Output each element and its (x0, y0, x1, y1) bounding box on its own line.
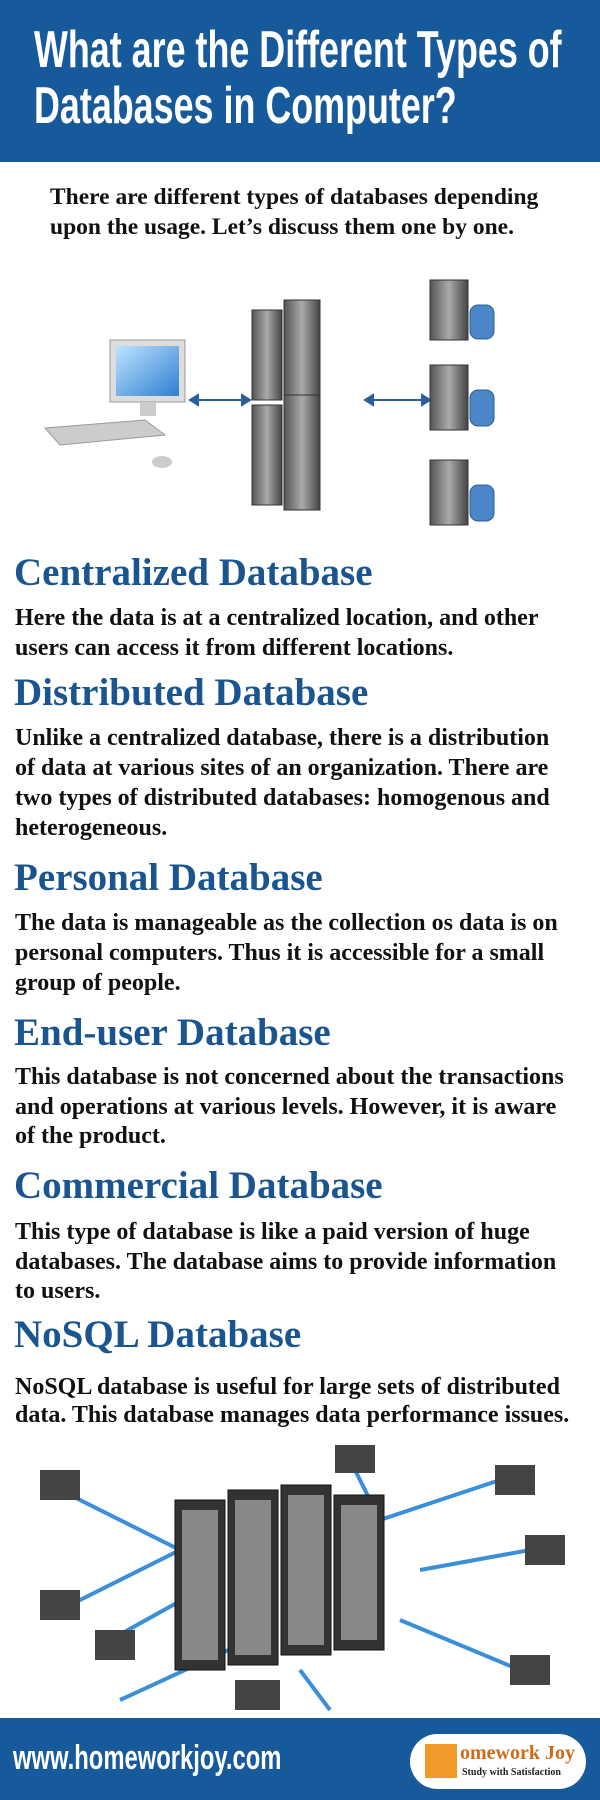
header banner (0, 0, 600, 162)
intro text (50, 184, 538, 240)
db servers (430, 280, 468, 525)
text: data. This database manages data performance issues. (15, 1402, 569, 1428)
text: heterogeneous. (15, 815, 167, 841)
title: Databases in Computer? (34, 77, 457, 135)
section: NoSQL: NoSQL Database (14, 1313, 301, 1356)
PCs (40, 1445, 565, 1710)
text: The data is manageable as the collection os data is on (15, 910, 558, 936)
section: End-user: End-user Database (14, 1011, 331, 1054)
footer (0, 1718, 600, 1800)
section: Centralized: Centralized Database (14, 551, 373, 594)
title: What are the Different Types of (34, 21, 562, 79)
section: Distributed: Distributed Database (14, 671, 368, 714)
website url: www.homeworkjoy.com (13, 1739, 281, 1777)
logo: omework Joy (460, 1742, 575, 1764)
section: Personal: Personal Database (14, 856, 323, 899)
text: and operations at various levels. However, it is aware (15, 1094, 556, 1120)
illustration: client, server cluster and database servers (44, 280, 494, 526)
intro text: upon the usage. Let’s discuss them one by one. (50, 214, 514, 240)
text: This type of database is like a paid version of huge (15, 1219, 530, 1245)
intro text: There are different types of databases depending (50, 184, 538, 210)
logo: Study with Satisfaction (462, 1767, 561, 1778)
illustration: network of servers (40, 1445, 565, 1712)
title (34, 21, 562, 135)
text: databases. The database aims to provide information (15, 1248, 556, 1274)
computer (45, 340, 185, 468)
text: to users. (15, 1278, 100, 1304)
text: Here the data is at a centralized location, and other (15, 605, 538, 631)
text: NoSQL database is useful for large sets of distributed (15, 1374, 560, 1400)
text: Unlike a centralized database, there is a distribution (15, 725, 549, 751)
server cluster (252, 300, 320, 510)
text: users can access it from different locations. (15, 634, 453, 660)
text: group of people. (15, 970, 181, 996)
text: two types of distributed databases: homogenous and (15, 785, 550, 811)
arrow left (190, 395, 250, 405)
racks (175, 1485, 384, 1670)
text: of the product. (15, 1123, 166, 1149)
text: personal computers. Thus it is accessible for a small (15, 940, 544, 966)
logo (410, 1734, 586, 1789)
section: Commercial: Commercial Database (14, 1164, 383, 1207)
text: of data at various sites of an organization. There are (15, 755, 548, 781)
arrow right (365, 395, 430, 405)
text: This database is not concerned about the transactions (15, 1064, 564, 1090)
